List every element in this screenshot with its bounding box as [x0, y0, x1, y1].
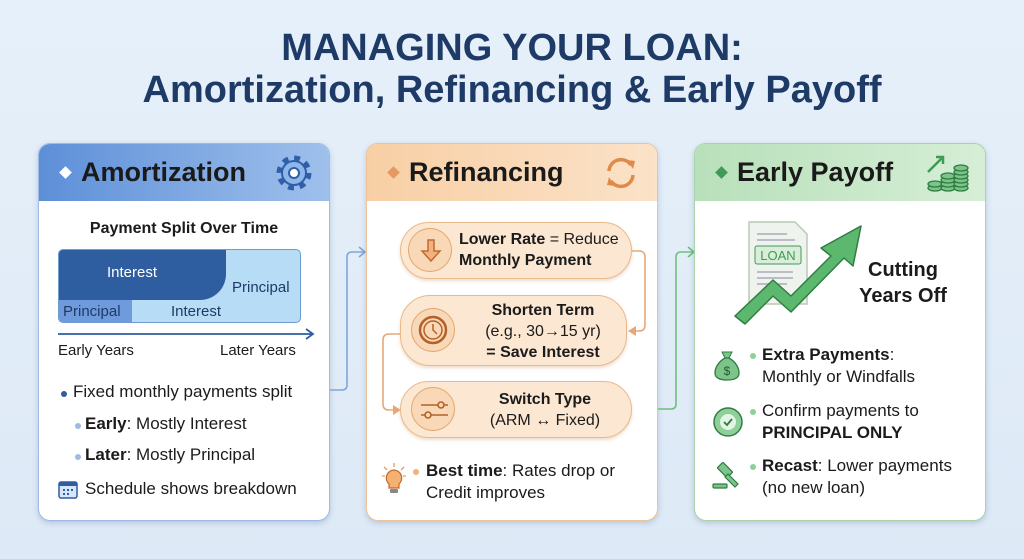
text: cutting years off: [859, 259, 947, 307]
pill: switch type: [400, 381, 632, 438]
arrow: refinancing to early payoff: [658, 246, 694, 410]
panel: amortization: [38, 143, 330, 521]
title: [142, 27, 882, 111]
illustration: loan document with arrow: LOAN: [760, 248, 796, 263]
header: refinancing: Refinancing: [409, 157, 564, 187]
chart: payment split: Principal: [232, 279, 290, 296]
arrow: amortization to refinancing: [330, 246, 366, 391]
pill: shorten term: (e.g., 30→15 yr): [485, 323, 601, 340]
pill: switch type: (ARM ↔ Fixed): [490, 412, 600, 429]
panel: amortization: Later Years: [220, 342, 296, 359]
pill: lower rate: Monthly Payment: [459, 252, 591, 269]
chart: payment split: [58, 249, 301, 323]
pill: shorten term: = Save Interest: [486, 344, 600, 361]
chart heading: Payment Split Over Time: [90, 220, 278, 237]
title: MANAGING YOUR LOAN:: [281, 27, 743, 69]
chart: payment split: Interest: [107, 264, 157, 281]
header: amortization: [39, 144, 329, 201]
bullet list: Fixed monthly payments split: [73, 382, 292, 401]
bullet list: [58, 382, 297, 499]
pill: lower rate: [400, 222, 632, 279]
list: early payoff tips: Monthly or Windfalls: [762, 367, 915, 386]
panel: refinancing: [366, 143, 658, 521]
list: early payoff tips: Recast: Lower payments: [762, 456, 952, 475]
icon: gavel: [712, 462, 739, 489]
list: early payoff tips: (no new loan): [762, 478, 865, 497]
arrow: timeline: [58, 328, 314, 340]
axis labels: Early Years: [58, 342, 134, 359]
chart: payment split: Interest: [171, 303, 221, 320]
pill: shorten term: [400, 295, 627, 366]
header: early payoff: Early Payoff: [737, 157, 893, 187]
list: early payoff tips: PRINCIPAL ONLY: [762, 423, 902, 442]
icon: coins: [927, 156, 969, 192]
panel: early payoff: [694, 143, 986, 521]
list: early payoff tips: [712, 345, 952, 497]
pill: switch type: Switch Type: [499, 391, 591, 408]
icon: money bag: [714, 352, 740, 381]
text: best time: Credit improves: [426, 483, 545, 502]
icon: gear: [276, 156, 312, 190]
text: cutting years off: Years Off: [859, 285, 947, 307]
pill: lower rate: Lower Rate = Reduce: [459, 231, 619, 248]
bullet list: Later: Mostly Principal: [85, 445, 255, 464]
title: Amortization, Refinancing & Early Payoff: [142, 69, 882, 111]
text: best time: [426, 461, 615, 502]
icon: refresh: [607, 158, 635, 188]
list: early payoff tips: Extra Payments:: [762, 345, 894, 364]
icon: calendar: [58, 481, 78, 499]
icon: money bag: $: [724, 364, 731, 378]
header: amortization: Amortization: [81, 157, 246, 187]
pill: shorten term: Shorten Term: [492, 302, 594, 319]
chart: payment split: Principal: [63, 303, 121, 320]
list: early payoff tips: Confirm payments to: [762, 401, 919, 420]
header: early payoff: [695, 144, 985, 201]
connectors between pills: [382, 250, 646, 415]
header: refinancing: [367, 144, 657, 201]
icon: check: [713, 407, 743, 437]
bullet list: Early: Mostly Interest: [85, 414, 247, 433]
illustration: loan document with arrow: [734, 221, 862, 325]
text: cutting years off: Cutting: [868, 259, 938, 281]
text: best time: Best time: Rates drop or: [426, 461, 615, 480]
icon: lightbulb: [382, 463, 406, 493]
bullet list: Schedule shows breakdown: [85, 479, 297, 498]
